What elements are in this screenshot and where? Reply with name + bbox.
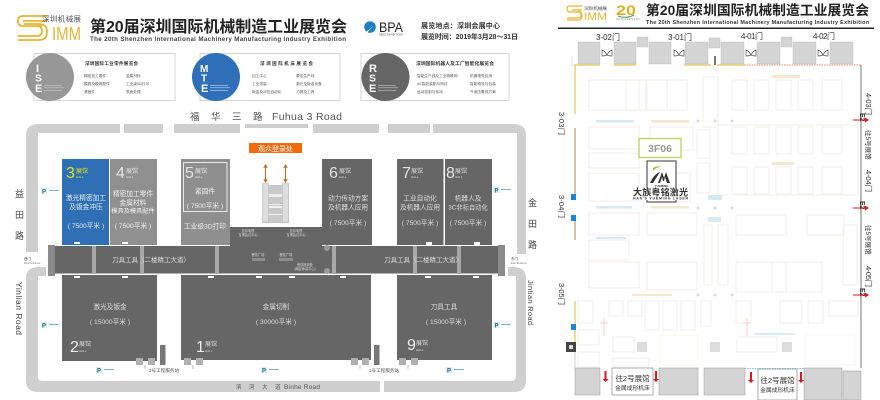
hall 7: HALL xyxy=(411,175,419,179)
road labels: Yitian, Jintian, Yinlian, Binhe: 路 xyxy=(15,230,24,241)
booth plan floor outlines xyxy=(578,77,858,367)
exit marks right: E2 xyxy=(858,113,865,122)
corridor: tool hall second floor: 餐饮广场 xyxy=(280,252,292,257)
panel: MTE xyxy=(192,53,340,101)
panel: RSE: 机器视觉应用 xyxy=(470,73,492,78)
panel: MTE: 深圳国际机床展览会 xyxy=(260,60,314,67)
callout: to hall 2 left xyxy=(612,368,653,395)
hall 4: 金属材料 xyxy=(120,198,147,207)
hall 1: ( 30000平米 ) xyxy=(256,317,296,326)
hall 7: 工业自动化 xyxy=(403,194,437,202)
panel: ISE xyxy=(26,53,175,101)
hall 6: 展馆 xyxy=(339,167,351,175)
panel: RSE: S xyxy=(369,72,376,84)
hall 8: 展馆 xyxy=(455,167,467,175)
gates west and east: 西门 xyxy=(24,256,31,261)
hall 2 xyxy=(62,275,157,361)
hall 9: HALL xyxy=(416,348,424,352)
door labels right: 4-04门 xyxy=(864,170,873,192)
road labels: Yitian, Jintian, Yinlian, Binhe: 田 xyxy=(528,219,537,229)
parking markers: P xyxy=(494,324,499,330)
logo: 20th anniversary xyxy=(616,2,640,21)
hall 3: 激光精密加工 xyxy=(66,193,106,202)
title right: The 20th Shenzhen International Machinery Manufacturing Industry Exhibition xyxy=(646,20,869,26)
road labels: Yitian, Jintian, Yinlian, Binhe: Yinlian Road xyxy=(14,282,24,335)
panel: MTE: 钣金及冲压自动化 xyxy=(252,89,282,94)
exit marks right: E2 xyxy=(858,288,865,297)
road labels: Yitian, Jintian, Yinlian, Binhe: 金 xyxy=(528,197,537,208)
hall 8: 8 xyxy=(446,165,455,182)
road labels: Yitian, Jintian, Yinlian, Binhe: 道 xyxy=(275,383,281,391)
panel: RSE: 气液压集成方案 xyxy=(470,89,496,94)
logo: SIMM right xyxy=(567,5,607,23)
callout: to hall 2 right xyxy=(758,369,797,400)
hall 3: HALL xyxy=(76,175,84,179)
hall 6: 6 xyxy=(329,165,338,182)
panel: MTE: 刀具及工具 xyxy=(296,89,315,94)
corridor: tool hall second floor: 餐饮广场 xyxy=(252,252,264,257)
hall 4: 4 xyxy=(116,165,125,182)
hall 5: 紧固件 xyxy=(195,186,215,196)
hall 1: 展馆 xyxy=(205,340,217,348)
parking markers: P xyxy=(494,188,499,194)
hall 2: 展馆 xyxy=(79,340,91,348)
panel: MTE: 工业测量 xyxy=(252,81,267,86)
title left: The 20th Shenzhen International Machinery Manufacturing Industry Exhibition xyxy=(90,36,346,43)
hall 4 xyxy=(110,159,157,245)
road labels: Yitian, Jintian, Yinlian, Binhe: 田 xyxy=(15,210,24,220)
logo: SIMM left xyxy=(18,14,82,44)
corridor: tool hall second floor: 互博会议中心 xyxy=(286,232,306,237)
hall 9 xyxy=(397,275,492,360)
hall 8: 机器人及 xyxy=(455,194,482,202)
parking markers: P xyxy=(262,368,266,374)
hall 5: 5 xyxy=(185,165,194,182)
callout: to hall 2 right: 金属成形机床 xyxy=(760,386,795,394)
panel: RSE: E xyxy=(369,83,376,95)
blue columns left xyxy=(571,194,576,330)
panel: ISE: 紧固件 xyxy=(84,89,95,94)
corridor: tool hall second floor: 餐饮座到处 xyxy=(297,262,314,267)
title right: 第20届深圳国际机械制造工业展览会 xyxy=(646,2,869,18)
road labels: Yitian, Jintian, Yinlian, Binhe: 河 xyxy=(249,383,255,391)
hall 9: 刀具工具 xyxy=(431,303,458,311)
bottom gray blocks xyxy=(575,368,861,400)
hall 5 xyxy=(181,159,230,245)
panel: ISE: 精密加工零件 xyxy=(84,73,106,78)
logo: Yueming Laser: HAN'S YUEMING LASER xyxy=(633,196,688,200)
title left xyxy=(90,17,347,43)
logo: SIMM right: IMM xyxy=(584,11,607,23)
hall 6: 及机器人应用 xyxy=(328,202,368,212)
route labels right: 往5号展馆 xyxy=(864,225,873,255)
hall 8: HALL xyxy=(455,175,463,179)
callout: to hall 2 left: 金属成形机床 xyxy=(615,384,650,392)
hall 4: 模具及模具配件 xyxy=(111,207,155,215)
parking markers: P xyxy=(447,368,451,374)
logo: BPA xyxy=(364,19,404,36)
logo: SIMM left: 深圳机械展 xyxy=(42,14,82,24)
hall 7: ( 7500平米 ) xyxy=(402,218,438,227)
road ring xyxy=(26,124,526,392)
hall 8: ( 7500平米 ) xyxy=(450,218,486,227)
booth number 3F06 xyxy=(639,138,681,158)
panel: RSE: 3C智能装配与测试 xyxy=(417,81,448,86)
logo: Yueming Laser: YUEMING xyxy=(654,184,669,188)
gates west and east: East Entrance xyxy=(511,262,527,265)
hall 4: HALL xyxy=(126,175,134,179)
corridor: tool hall second floor: 显示电视 xyxy=(242,228,255,233)
hall 4: 精密加工零件 xyxy=(113,189,153,198)
panel: MTE: 加工中心 xyxy=(252,73,267,78)
hall 8: 3C非标自动化 xyxy=(448,202,488,212)
hall 5: HALL xyxy=(195,175,203,179)
service stations: 2号工程服务站 xyxy=(149,367,180,374)
road label: Fuhua 3 Road: 福 xyxy=(190,111,200,123)
hall 4: 展馆 xyxy=(126,167,138,175)
hall 9: 展馆 xyxy=(416,339,428,347)
registration label xyxy=(249,143,302,153)
hall 3 xyxy=(62,159,109,245)
hall 4: ( 7500平米 ) xyxy=(115,221,151,230)
door labels top: 4-02门 xyxy=(813,31,835,41)
panel: ISE: 深圳国际工业零件展览会 xyxy=(85,60,138,67)
hall 5: 展馆 xyxy=(195,167,207,175)
door labels top: 4-01门 xyxy=(741,31,763,41)
panel: RSE: 运动控制与传动 xyxy=(417,89,443,94)
door labels right: 4-05门 xyxy=(864,266,873,287)
door labels right: 4-03门 xyxy=(864,93,873,115)
booth number 3F06: 3F06 xyxy=(648,143,672,155)
hall 3: 展馆 xyxy=(76,167,88,175)
road labels: Yitian, Jintian, Yinlian, Binhe xyxy=(14,188,537,391)
panel: ISE: S xyxy=(35,72,42,84)
panel: ISE: 金属材料 xyxy=(126,73,141,78)
hall 9: 9 xyxy=(407,337,416,354)
panel: MTE: 激光及钣金设备 xyxy=(296,81,322,86)
service stations: 1号工程服务站 xyxy=(369,367,400,374)
door labels left: 3-05门 xyxy=(557,283,566,305)
panel: MTE: M xyxy=(200,64,208,75)
road labels: Yitian, Jintian, Yinlian, Binhe: 大 xyxy=(262,383,268,391)
gates west and east: West Entrance xyxy=(24,262,41,265)
panel: ISE: E xyxy=(35,83,42,95)
road label: Fuhua 3 Road: 华 xyxy=(211,111,221,123)
route labels right xyxy=(864,130,873,255)
road labels: Yitian, Jintian, Yinlian, Binhe: 路 xyxy=(528,239,537,250)
panel: ISE: 表面处理 xyxy=(126,89,141,94)
logo: SIMM right: 深圳机械展 xyxy=(584,5,607,12)
venue and date: 展览地点：深圳会展中心 xyxy=(421,21,500,30)
panel: RSE xyxy=(361,53,509,101)
parking markers: P xyxy=(42,190,46,196)
logo: BPA: BPA xyxy=(379,19,404,35)
logo: 20th anniversary: 20 xyxy=(616,2,636,18)
road label: Fuhua 3 Road xyxy=(190,111,342,123)
panel: ISE: I xyxy=(36,63,39,75)
panel: MTE: T xyxy=(201,74,207,84)
gates west and east: 东门 xyxy=(511,256,518,261)
panel: RSE: 智能生产线及工业物联网 xyxy=(417,73,458,78)
door labels left: 3-04门 xyxy=(557,195,566,218)
hall 6: ( 7500平米 ) xyxy=(330,218,366,227)
panel: RSE: 智能物流与包装 xyxy=(470,81,496,86)
hall 3: 3 xyxy=(66,165,75,182)
registration label: 观众登录处 xyxy=(258,144,293,153)
logo: SIMM left: IMM xyxy=(52,24,81,44)
panel: RSE: 深圳国际机器人及工厂智能化展览会 xyxy=(416,60,494,67)
parking markers xyxy=(41,187,511,374)
service stations xyxy=(136,345,418,374)
title left: 第20届深圳国际机械制造工业展览会 xyxy=(90,17,347,36)
pale zone markers xyxy=(596,75,800,352)
hall 7: 7 xyxy=(402,165,411,182)
door labels left xyxy=(557,112,566,305)
wall outline and yellow wall xyxy=(572,56,861,368)
stairs block xyxy=(566,342,576,352)
logo: BPA: REED EXHIBITIONS xyxy=(379,34,403,36)
road labels: Yitian, Jintian, Yinlian, Binhe: 益 xyxy=(15,188,24,199)
corridor: tool hall second floor: 显示电视 xyxy=(290,228,303,233)
callout: to hall 2 left: 往2号展馆 xyxy=(615,373,650,383)
door labels top: 3-01门 xyxy=(668,32,692,42)
corridor: tool hall second floor: 互博会议中心 xyxy=(238,232,258,237)
hall 1 xyxy=(181,275,371,360)
red arrows right xyxy=(853,118,869,298)
hall 7 xyxy=(397,159,444,245)
logo: Yueming Laser: 大族粤铭激光 xyxy=(633,186,688,198)
door labels left: 3-03门 xyxy=(557,112,566,135)
hall 2: 激光及钣金 xyxy=(93,302,127,311)
corridor: tool hall second floor: 刀具工具（二楼精工大道） xyxy=(112,255,190,264)
hall 1: 金属切削 xyxy=(263,302,290,311)
corridor: tool hall second floor: (南区休息中心) xyxy=(294,266,316,271)
exit marks right xyxy=(858,113,865,297)
logo: 20th anniversary: ANNIVERSARY xyxy=(616,18,640,21)
hall 7: 展馆 xyxy=(411,167,423,175)
hall 5: 工业级3D打印 xyxy=(184,222,226,230)
venue and date: 展览时间：2019年3月28～31日 xyxy=(421,32,518,41)
hall 6: 动力传动方案 xyxy=(328,194,368,202)
road labels: Yitian, Jintian, Yinlian, Binhe: Binhe Road xyxy=(284,384,320,391)
panel: RSE: R xyxy=(369,63,377,75)
panel: MTE: 柔性生产线 xyxy=(296,73,315,78)
road label: Fuhua 3 Road: 三 xyxy=(232,112,242,123)
panel: ISE: 工业级3D打印 xyxy=(126,81,149,86)
hall 6 xyxy=(322,159,372,245)
door labels top: 3-02门 xyxy=(596,32,620,42)
title right xyxy=(646,2,869,26)
venue and date xyxy=(421,21,518,41)
door labels right xyxy=(864,93,873,287)
route labels right: 往5号展馆 xyxy=(864,130,873,160)
hall 1: HALL xyxy=(205,349,213,353)
hall 5: ( 7500平米 ) xyxy=(187,201,223,210)
door icons xyxy=(602,50,828,56)
panel: ISE: 模具及模具配件 xyxy=(84,81,110,86)
callout: to hall 2 right: 往2号展馆 xyxy=(760,375,795,385)
hall 8 xyxy=(445,159,492,245)
hall 3: 及钣金冲压 xyxy=(69,202,103,211)
corridor: tool hall second floor: 刀具工具（二楼精工大道） xyxy=(384,255,462,264)
panel: MTE: E xyxy=(201,83,208,95)
door labels top xyxy=(596,31,835,42)
escalator stairs xyxy=(262,165,289,223)
hall 6: HALL xyxy=(339,175,347,179)
hall 2: HALL xyxy=(79,349,87,353)
corridor: tool hall second floor xyxy=(46,227,505,276)
hall 2: ( 15000平米 ) xyxy=(90,317,130,326)
hall 2: 2 xyxy=(70,339,79,356)
gates west and east xyxy=(24,256,527,265)
road label: Fuhua 3 Road: 路 xyxy=(253,111,263,123)
top gray entrance blocks xyxy=(578,37,853,64)
road labels: Yitian, Jintian, Yinlian, Binhe: Jintian Road xyxy=(526,280,535,325)
parking markers: P xyxy=(97,368,101,374)
hall 7: 及机器人应用 xyxy=(400,202,440,212)
hall 1: 1 xyxy=(196,339,205,356)
red arrows bottom xyxy=(602,371,804,383)
road labels: Yitian, Jintian, Yinlian, Binhe: 滨 xyxy=(236,383,242,391)
hall 3: ( 7500平米 ) xyxy=(68,221,104,230)
logo: Yueming Laser xyxy=(633,161,689,202)
road label: Fuhua 3 Road: Fuhua 3 Road xyxy=(272,111,342,123)
hall 9: ( 15000平米 ) xyxy=(426,317,466,326)
exit marks right: E2 xyxy=(858,201,865,210)
parking markers: P xyxy=(42,324,46,330)
